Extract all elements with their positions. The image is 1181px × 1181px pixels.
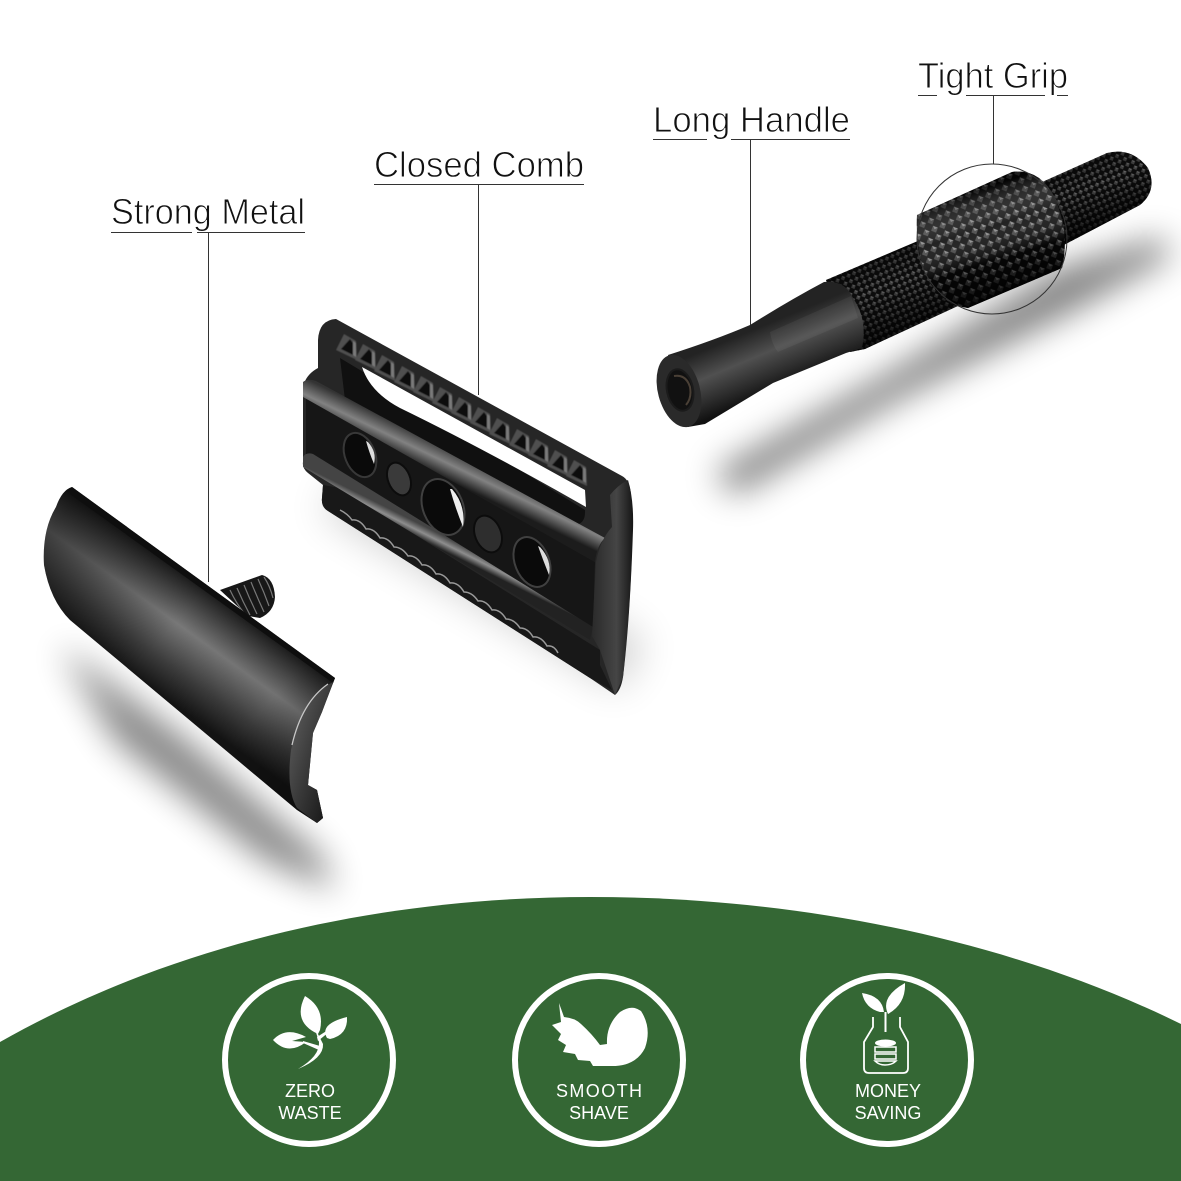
label: Tight Grip [918, 55, 1068, 164]
icon: cap screw [220, 575, 275, 618]
cap body [44, 487, 335, 823]
handle end face [649, 350, 709, 432]
handle knob knurl [1040, 152, 1152, 250]
text: money saving: MONEY [855, 1081, 921, 1101]
comb teeth [336, 334, 587, 486]
handle body knurl [826, 238, 960, 352]
comb slot recess [340, 358, 585, 525]
handle knob shading [1040, 152, 1152, 250]
comb lower plate [322, 485, 612, 690]
cap highlight [292, 684, 328, 745]
cap end face [289, 682, 333, 823]
part: razor cap [44, 487, 335, 823]
icon: tight grip magnified circle [917, 164, 1067, 314]
cap top edge [70, 487, 335, 683]
label: Tight Grip: Tight Grip [918, 55, 1068, 96]
badge: smooth shave [515, 976, 683, 1144]
handle body shading [826, 238, 960, 352]
part: handle [649, 152, 1152, 432]
comb lower rail [303, 453, 593, 640]
label: Long Handle [653, 99, 850, 325]
label: Strong Metal [111, 191, 305, 582]
shadow: handle [715, 238, 1172, 495]
label: Strong Metal: Strong Metal [111, 191, 305, 232]
cap axial shading [44, 487, 335, 823]
badge: money saving [803, 976, 971, 1144]
comb body [303, 319, 632, 695]
part: closed comb [303, 319, 633, 695]
handle section step [770, 296, 858, 352]
icon: sprout [273, 996, 347, 1069]
icon: feather [552, 1003, 648, 1066]
shadow: comb [320, 480, 645, 690]
green footer arc [0, 897, 1181, 1181]
text: smooth shave: SMOOTH [556, 1081, 642, 1101]
label: Long Handle: Long Handle [653, 99, 850, 140]
comb end plate [592, 480, 633, 695]
icon: bottle with sprout [862, 983, 908, 1073]
text: zero waste: WASTE [278, 1103, 342, 1123]
handle smooth section [668, 282, 864, 427]
shadow: cap [60, 645, 335, 890]
label: Closed Comb: Closed Comb [374, 144, 584, 185]
comb blade slot [362, 367, 586, 507]
comb upper rail [303, 380, 605, 562]
comb guard wave [340, 510, 558, 653]
comb holes [337, 428, 558, 592]
text: smooth shave: SHAVE [569, 1103, 629, 1123]
label: Closed Comb [374, 144, 584, 395]
text: money saving: SAVING [855, 1103, 921, 1123]
text: zero waste: ZERO [285, 1081, 335, 1101]
badge: zero waste [225, 976, 393, 1144]
comb dark centre band [306, 397, 595, 628]
